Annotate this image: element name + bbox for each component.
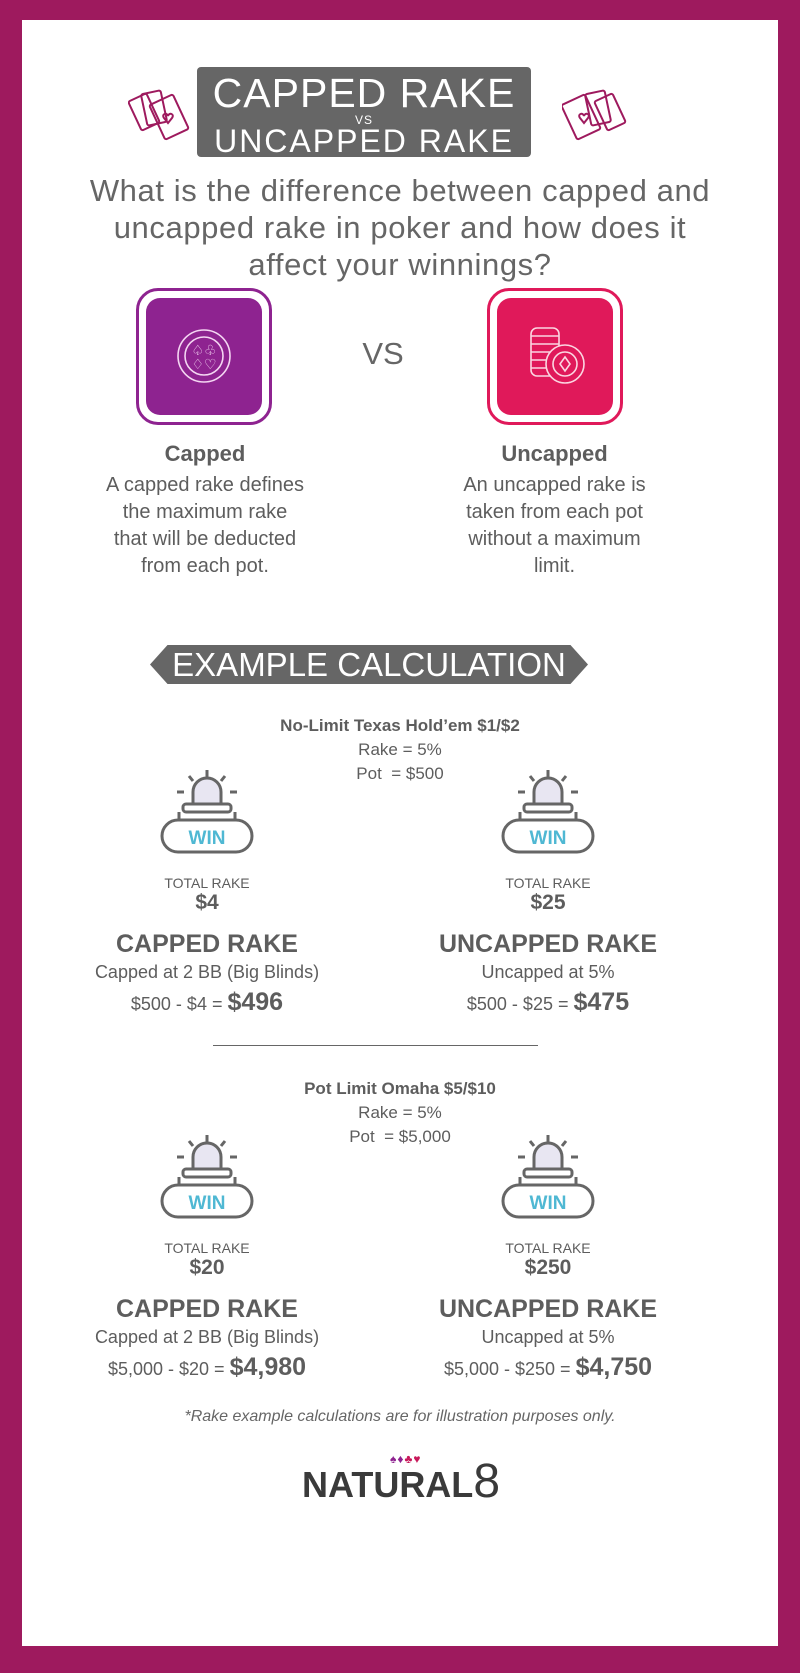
title box: [197, 67, 531, 157]
example 1 capped: CAPPED RAKE: [116, 930, 298, 958]
example 1 heading: Rake = 5%: [358, 740, 442, 759]
example 2 capped: [95, 1135, 319, 1381]
uncapped text: without a maximum: [468, 528, 641, 550]
example 1 uncapped: UNCAPPED RAKE: [439, 930, 657, 958]
capped text: Capped: [165, 441, 245, 466]
question text: affect your winnings?: [248, 247, 552, 282]
example 1 uncapped: $25: [530, 891, 566, 914]
panel: capped icon: ♢♡: [191, 356, 217, 372]
banner: example calculation: EXAMPLE CALCULATION: [172, 646, 566, 683]
capped text: the maximum rake: [123, 501, 287, 523]
example 2 uncapped: TOTAL RAKE: [505, 1240, 591, 1256]
example 2 heading: Pot Limit Omaha $5/$10: [304, 1079, 496, 1098]
panel: capped icon: [136, 288, 272, 425]
example 1 uncapped: TOTAL RAKE: [505, 875, 591, 891]
logo: NATURAL8: [302, 1455, 500, 1508]
example 2 capped: $20: [189, 1256, 225, 1279]
uncapped text: [463, 441, 646, 577]
example 1 uncapped: WIN: [530, 828, 566, 849]
example 1 uncapped: Uncapped at 5%: [481, 962, 615, 982]
vs: VS: [362, 336, 404, 371]
example 1 heading: Pot = $500: [356, 764, 444, 783]
icon: cards left: [128, 90, 190, 140]
uncapped text: taken from each pot: [466, 501, 643, 523]
example 1 capped: WIN: [189, 828, 225, 849]
example 2 uncapped: Uncapped at 5%: [481, 1327, 615, 1347]
example 1 capped: $500 - $4 = $496: [131, 988, 283, 1016]
example 2 heading: Rake = 5%: [358, 1103, 442, 1122]
example 2 capped: CAPPED RAKE: [116, 1295, 298, 1323]
panel: uncapped icon: [487, 288, 623, 425]
icon: cards right: [562, 90, 626, 140]
capped text: that will be deducted: [114, 528, 296, 550]
footnote: *Rake example calculations are for illustration purposes only.: [184, 1408, 616, 1425]
uncapped text: An uncapped rake is: [463, 474, 646, 496]
example 1 capped: Capped at 2 BB (Big Blinds): [95, 962, 319, 982]
capped text: [106, 441, 304, 577]
example 2 capped: $5,000 - $20 = $4,980: [108, 1353, 306, 1381]
example 2 uncapped: [439, 1135, 657, 1381]
example 2 heading: Pot = $5,000: [349, 1127, 451, 1146]
title box: VS: [355, 113, 373, 127]
capped text: from each pot.: [141, 555, 269, 577]
example 2 capped: Capped at 2 BB (Big Blinds): [95, 1327, 319, 1347]
example 1 uncapped: [439, 770, 657, 1016]
example 2 uncapped: $250: [525, 1256, 571, 1279]
example 2 uncapped: UNCAPPED RAKE: [439, 1295, 657, 1323]
example 2 capped: TOTAL RAKE: [164, 1240, 250, 1256]
title box: UNCAPPED RAKE: [214, 123, 514, 159]
example 1 heading: No-Limit Texas Hold’em $1/$2: [280, 716, 520, 735]
question text: [90, 173, 710, 282]
example 1 capped: TOTAL RAKE: [164, 875, 250, 891]
example 2 uncapped: $5,000 - $250 = $4,750: [444, 1353, 652, 1381]
title box: CAPPED RAKE: [213, 70, 515, 116]
logo: ♠♦♣♥: [390, 1452, 422, 1466]
example 1 uncapped: $500 - $25 = $475: [467, 988, 629, 1016]
uncapped text: limit.: [534, 555, 575, 577]
panel: capped icon: ♤♧: [191, 342, 217, 358]
example 2 heading: [304, 1079, 496, 1146]
question text: uncapped rake in poker and how does it: [114, 210, 686, 245]
example 1 capped: [95, 770, 319, 1016]
capped text: A capped rake defines: [106, 474, 304, 496]
example 2 uncapped: WIN: [530, 1193, 566, 1214]
example 1 capped: $4: [195, 891, 219, 914]
example 1 heading: [280, 716, 520, 783]
uncapped text: Uncapped: [501, 441, 608, 466]
example 2 capped: WIN: [189, 1193, 225, 1214]
question text: What is the difference between capped and: [90, 173, 710, 208]
